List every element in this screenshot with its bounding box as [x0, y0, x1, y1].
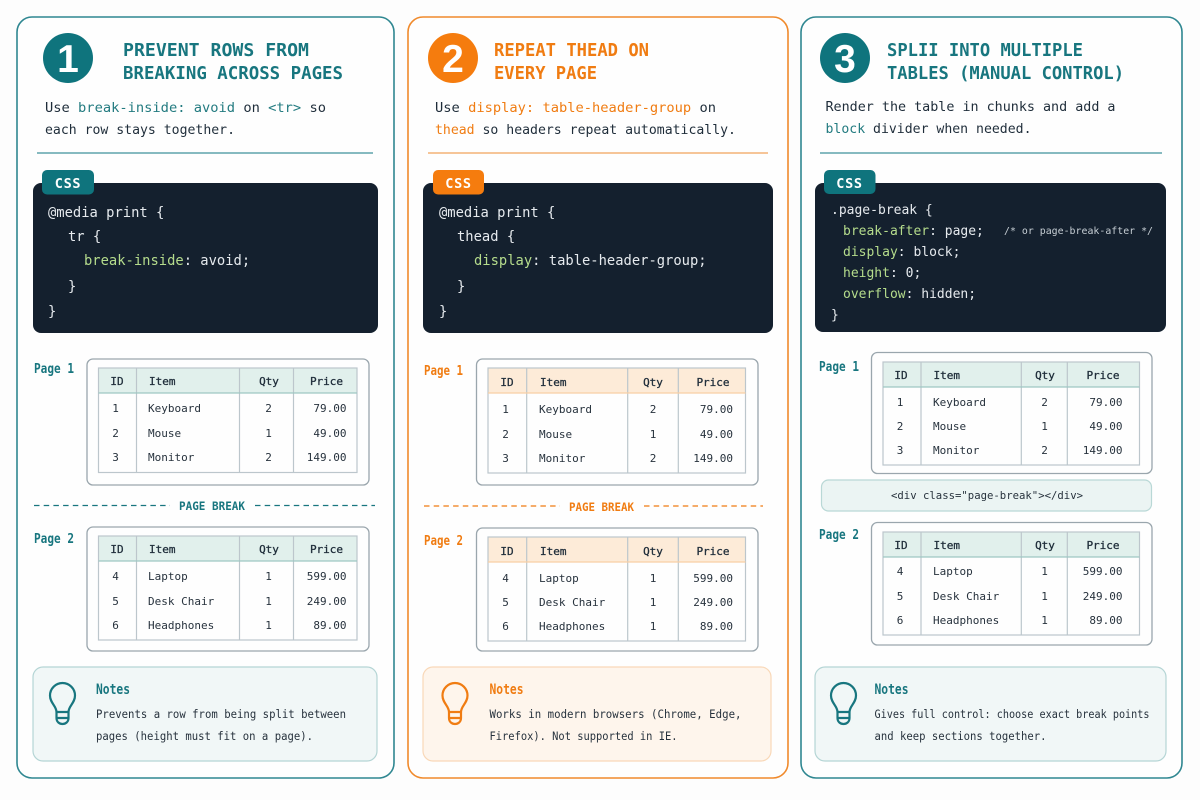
page 2 table: ID: [500, 545, 514, 558]
page 2 label: Page 2: [819, 528, 859, 543]
page 1 table: 79.00: [700, 403, 733, 416]
panel 2 notes: Works in modern browsers (Chrome, Edge,: [490, 707, 742, 721]
CSS tab: CSS: [55, 176, 81, 192]
page 2 table: 1: [1041, 565, 1048, 578]
page 2 table: [476, 528, 758, 651]
panel 1: prevent rows from breaking: [17, 17, 394, 778]
page 2 table: 5: [502, 596, 509, 609]
page 1 label: Page 1: [424, 364, 463, 379]
page 2 table: 599.00: [307, 570, 346, 583]
page 2 table: 6: [897, 614, 903, 627]
page 2 table: Desk Chair: [539, 596, 606, 609]
page 2 table: 6: [502, 620, 509, 633]
page 2 table: Price: [696, 545, 730, 558]
page 1 table: 1: [897, 396, 903, 409]
icon: light bulb: [50, 683, 75, 724]
panel 3 title: SPLII INTO MULTIPLE: [887, 40, 1083, 61]
panel 2 description: [435, 100, 736, 138]
panel 1 code block: break-inside: avoid;: [84, 253, 250, 269]
panel 2 description: thead so headers repeat automatically.: [435, 122, 736, 138]
panel 2 code block: }: [439, 304, 447, 320]
page 2 table: 249.00: [1083, 590, 1122, 603]
panel 2 title: [494, 40, 649, 84]
panel 1 code block: }: [48, 304, 56, 320]
page 2 table: 4: [897, 565, 904, 578]
number badge 1: [43, 33, 93, 83]
page break marker: PAGE BREAK: [179, 499, 245, 513]
page 2 table: Desk Chair: [148, 595, 215, 608]
CSS tab: [433, 170, 484, 194]
page 2 table: 1: [650, 620, 656, 633]
page 2 table: 599.00: [1083, 565, 1122, 578]
page 2 table: Qty: [643, 545, 663, 558]
page 2 label: Page 2: [424, 534, 463, 549]
panel 2 notes: Firefox). Not supported in IE.: [490, 729, 678, 743]
panel 3 description: block divider when needed.: [826, 121, 1032, 137]
panel 3 notes: Gives full control: choose exact break points: [874, 707, 1150, 721]
page 1 table: 2: [502, 428, 509, 441]
panel 1 notes: Notes: [96, 682, 130, 698]
page 1 table: 2: [897, 420, 903, 433]
page 2 table: Item: [540, 545, 567, 558]
page 2 table: 1: [650, 596, 656, 609]
panel 2 code block: display: table-header-group;: [474, 253, 707, 269]
page 1 table: [872, 352, 1152, 474]
page 1 table: 79.00: [313, 402, 346, 415]
page 1 table: 2: [265, 402, 272, 415]
page 2 table: [872, 522, 1152, 645]
page 2 table: ID: [110, 543, 124, 556]
page 1 table: Keyboard: [933, 396, 986, 409]
panel 2 description: Use display: table-header-group on: [435, 100, 716, 116]
page 2 table: Price: [1086, 539, 1120, 552]
page 2 table: Price: [310, 543, 343, 556]
page 2 table: Laptop: [148, 570, 188, 583]
page 2 table: Qty: [259, 543, 279, 556]
page 2 table: Desk Chair: [933, 590, 1000, 603]
page break div callout: [822, 480, 1152, 511]
page 2 table: 4: [112, 570, 119, 583]
page 2 table: 1: [1041, 614, 1048, 627]
page 1 table: 3: [502, 452, 509, 465]
page 1 table: Monitor: [933, 444, 980, 457]
page 1 table: Qty: [259, 375, 279, 388]
panel 3 notes: Notes: [874, 682, 908, 698]
panel 1 notes: pages (height must fit on a page).: [96, 729, 313, 743]
page 2 table: 89.00: [313, 619, 346, 632]
number badge 3: [820, 33, 870, 83]
panel 2 title: EVERY PAGE: [494, 63, 597, 84]
page 1 table: 2: [650, 403, 656, 416]
page 2 table: 249.00: [307, 595, 346, 608]
panel 1 title: [123, 40, 343, 84]
page 1 table: Price: [1086, 369, 1120, 382]
page 1 table: Monitor: [539, 452, 586, 465]
page 1 table: 1: [112, 402, 119, 415]
page 2 table: ID: [894, 539, 908, 552]
page 1 table: [476, 359, 758, 485]
page 1 table: Keyboard: [148, 402, 201, 415]
page 2 table: [87, 527, 369, 651]
number badge 3: 3: [834, 38, 856, 81]
page 1 table: Mouse: [933, 420, 966, 433]
panel 1 description: each row stays together.: [45, 122, 235, 138]
CSS tab: CSS: [836, 176, 863, 192]
page 2 table: Item: [149, 543, 176, 556]
page 1 table: Qty: [643, 376, 663, 389]
page 1 table: 1: [1041, 420, 1048, 433]
page 1 table: 2: [1041, 396, 1048, 409]
page 1 table: 3: [897, 444, 903, 457]
page 1 label: Page 1: [34, 362, 74, 377]
page 1 table: Item: [149, 375, 176, 388]
page 2 table: 5: [112, 595, 119, 608]
panel 2: repeat thead on every page: [408, 17, 788, 778]
number badge 2: [428, 33, 478, 83]
page 2 table: Item: [934, 539, 960, 552]
panel 3 code block: display: block;: [843, 245, 960, 260]
panel 3 code block: }: [831, 308, 839, 323]
page 1 table: 149.00: [307, 451, 346, 464]
page 1 table: ID: [500, 376, 514, 389]
panel 3 description: Render the table in chunks and add a: [826, 99, 1116, 115]
number badge 2: 2: [442, 38, 464, 81]
panel 2 code block: thead {: [457, 229, 515, 245]
page break marker: PAGE BREAK: [569, 500, 634, 514]
page 1 table: Item: [934, 369, 960, 382]
page 1 table: 2: [112, 427, 119, 440]
panel 1 notes: [33, 667, 377, 761]
panel 3 code block: .page-break {: [831, 203, 933, 218]
CSS tab: [824, 170, 876, 194]
page 2 label: Page 2: [34, 532, 74, 547]
CSS tab: CSS: [445, 176, 472, 192]
panel 3 code block: height: 0;: [843, 266, 921, 281]
panel 2 code block: @media print {: [439, 205, 555, 221]
page 1 table: Keyboard: [539, 403, 592, 416]
page 1 table: Qty: [1035, 369, 1055, 382]
page 2 table: 1: [1041, 590, 1048, 603]
page 1 table: 149.00: [693, 452, 733, 465]
panel 3 description: [826, 99, 1116, 137]
panel 1 notes: Prevents a row from being split between: [96, 707, 346, 721]
page 1 table: 79.00: [1089, 396, 1122, 409]
icon: light bulb: [831, 683, 856, 724]
page 2 table: Qty: [1035, 539, 1055, 552]
page 2 table: 6: [112, 619, 119, 632]
page 2 table: 1: [265, 619, 272, 632]
page 1 table: Mouse: [148, 427, 181, 440]
page 1 table: ID: [894, 369, 908, 382]
page 1 table: Item: [540, 376, 567, 389]
panel 3 notes: [815, 667, 1166, 761]
page 1 table: 3: [112, 451, 119, 464]
number badge 1: 1: [57, 38, 79, 81]
panel 3 code block: [815, 170, 1166, 332]
page 1 table: 2: [1041, 444, 1048, 457]
panel 2 code block: [423, 170, 773, 333]
panel 1 code block: }: [68, 279, 76, 295]
panel 2 notes: [423, 667, 771, 761]
panel 1 code block: [33, 170, 378, 333]
panel 3 notes: and keep sections together.: [874, 729, 1046, 743]
panel 3 code block: break-after: page;: [843, 224, 984, 239]
panel 3 code block: overflow: hidden;: [843, 287, 976, 302]
panel 1 code block: tr {: [68, 229, 101, 245]
page 2 table: Headphones: [539, 620, 605, 633]
page 2 table: 1: [650, 572, 656, 585]
page 2 table: Laptop: [933, 565, 973, 578]
page 2 table: Headphones: [148, 619, 214, 632]
panel 1 description: [45, 100, 326, 138]
page 1 table: Mouse: [539, 428, 572, 441]
page 2 table: 249.00: [693, 596, 733, 609]
page 1 table: Price: [696, 376, 730, 389]
panel 3 code block: /* or page-break-after */: [1004, 226, 1153, 237]
page 1 table: 1: [502, 403, 509, 416]
page 1 table: 149.00: [1083, 444, 1122, 457]
page 2 table: 1: [265, 570, 272, 583]
panel 1 title: PREVENT ROWS FROM: [123, 40, 309, 61]
panel 1 title: BREAKING ACROSS PAGES: [123, 63, 343, 84]
panel 2 code block: }: [457, 279, 465, 295]
panel 3: split into multiple tables: [801, 17, 1182, 778]
page 1 table: 49.00: [1089, 420, 1122, 433]
page 2 table: 4: [502, 572, 509, 585]
page 1 table: 49.00: [313, 427, 346, 440]
page 1 table: 2: [265, 451, 272, 464]
page 2 table: 89.00: [700, 620, 733, 633]
page 2 table: 1: [265, 595, 272, 608]
page 1 table: 2: [650, 452, 656, 465]
icon: light bulb: [442, 683, 468, 724]
page 2 table: Laptop: [539, 572, 579, 585]
page 1 table: ID: [110, 375, 124, 388]
page 1 table: 1: [265, 427, 272, 440]
page 2 table: Headphones: [933, 614, 999, 627]
page break div callout: <div class="page-break"></div>: [891, 489, 1083, 502]
page 1 table: 1: [650, 428, 656, 441]
page 1 label: Page 1: [819, 360, 859, 375]
page 1 table: Price: [310, 375, 343, 388]
page 2 table: 89.00: [1089, 614, 1122, 627]
panel 3 title: TABLES (MANUAL CONTROL): [887, 63, 1124, 84]
panel 2 notes: Notes: [490, 682, 524, 698]
page 1 table: Monitor: [148, 451, 195, 464]
page 2 table: 599.00: [693, 572, 733, 585]
panel 3 title: [887, 40, 1124, 84]
page 1 table: [87, 359, 369, 485]
page 2 table: 5: [897, 590, 903, 603]
panel 1 code block: @media print {: [48, 205, 164, 221]
panel 2 title: REPEAT THEAD ON: [494, 40, 649, 61]
panel 1 description: Use break-inside: avoid on <tr> so: [45, 100, 326, 116]
CSS tab: [42, 170, 94, 194]
page 1 table: 49.00: [700, 428, 733, 441]
